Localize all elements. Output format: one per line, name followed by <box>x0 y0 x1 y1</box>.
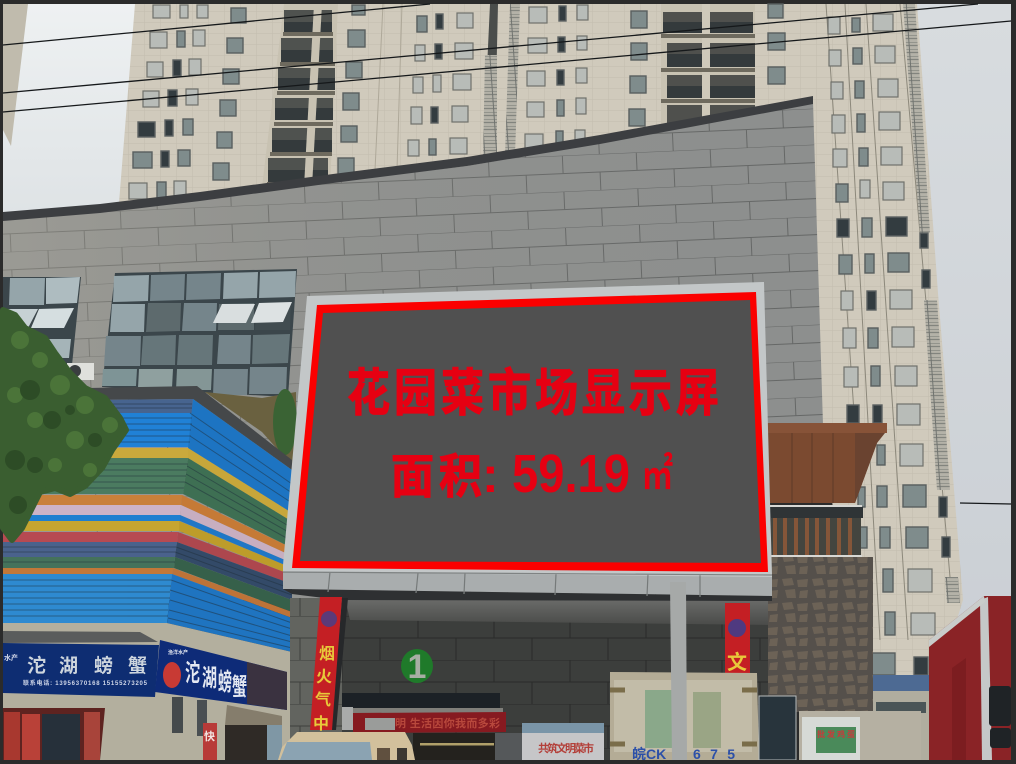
colourful slatted facade <box>3 386 292 652</box>
slat shadow lines <box>3 404 292 648</box>
small red sign: 快 <box>204 729 215 743</box>
poster <box>645 690 672 748</box>
frame lower shadow line <box>283 589 772 601</box>
poster <box>693 692 721 748</box>
wing lattice bottom <box>945 577 960 603</box>
red entrance banner: 明 生活因你我而多彩 <box>395 716 500 730</box>
bottom border <box>0 760 1016 764</box>
second truck rear <box>799 711 921 760</box>
entrance light strip <box>353 708 503 714</box>
lower cladding tint <box>283 572 772 596</box>
wing lattice lower <box>924 300 950 490</box>
wing vertical seams <box>826 4 952 640</box>
soffit <box>345 598 772 625</box>
red banner left: 气 <box>315 691 331 709</box>
right border <box>1011 0 1016 764</box>
centre window bays <box>408 13 473 156</box>
red entrance banner <box>353 712 506 733</box>
awning ledge <box>3 631 158 643</box>
green number 1 marker <box>401 648 433 686</box>
red banner left: 烟 <box>319 645 335 663</box>
wing windows <box>828 14 935 675</box>
tower base mass <box>118 4 963 700</box>
grey box <box>342 707 353 730</box>
sign: front seafood store <box>3 643 159 697</box>
screen title: 花园菜市场显示屏 <box>347 364 723 421</box>
red banner left: 中 <box>313 715 329 733</box>
entrance opening <box>413 733 495 760</box>
emblem <box>321 611 337 627</box>
slatted band under canopy <box>770 505 863 557</box>
front face slat bands <box>3 399 193 623</box>
utility box <box>495 733 522 760</box>
dark screen surface <box>300 300 761 563</box>
screen area value: ㎡ <box>642 451 673 498</box>
sign: side seafood store: 螃 <box>218 669 232 696</box>
grey clad podium wall <box>3 102 823 600</box>
truck rear with posters <box>610 672 759 762</box>
sign pole <box>670 582 687 760</box>
air conditioner unit <box>67 363 94 380</box>
red banner right <box>725 603 750 674</box>
overhead power lines <box>3 4 1011 504</box>
red banner left <box>310 597 342 733</box>
sky left <box>3 4 203 304</box>
underpass dark wall <box>340 598 772 760</box>
sign: front seafood store: 蟹 <box>128 655 147 677</box>
balcony stack left <box>262 4 338 187</box>
centre-right window bays <box>525 5 588 150</box>
shop entrance <box>225 705 282 760</box>
red banner right: 文 <box>727 650 747 674</box>
left glass curtain wall <box>3 277 81 365</box>
climbing plant <box>273 389 297 455</box>
sign: side seafood store: 沱 <box>185 659 200 687</box>
rooftop planting <box>205 392 296 470</box>
second truck rear: 批发鸡蛋 <box>817 729 855 739</box>
mascot icon <box>163 662 181 688</box>
sign: front seafood store: 湖 <box>59 655 78 677</box>
shop facade below slats <box>3 623 292 760</box>
dark post beside banner <box>331 598 348 730</box>
stone clad pier <box>768 557 873 712</box>
delivery van <box>278 718 415 760</box>
screen area value: 面积 <box>391 450 487 503</box>
building: far-left corner <box>3 4 28 146</box>
emblem <box>728 619 746 637</box>
truck rear with posters: 675 <box>693 746 735 762</box>
screen area value: : <box>482 447 499 503</box>
screen aluminium frame <box>283 282 772 596</box>
sign: side seafood store <box>155 640 287 710</box>
sign: side seafood store: 湖 <box>202 665 217 692</box>
warm wall shading <box>3 102 823 600</box>
slats roof <box>88 386 292 470</box>
green number 1 marker: 1 <box>408 648 426 686</box>
left tower barred and narrow windows <box>129 5 208 199</box>
sign: side seafood store: 蟹 <box>232 674 247 701</box>
centre glass curtain wall <box>102 269 297 397</box>
red outline <box>292 292 768 572</box>
sign: side seafood store: 渔洋水产 <box>168 649 188 656</box>
copper panel canopy <box>767 423 887 503</box>
pier windows right <box>629 4 785 126</box>
shop window <box>3 708 105 760</box>
entrance lintel <box>342 693 500 710</box>
tree <box>3 310 126 540</box>
recess left <box>172 697 183 733</box>
sign: front seafood store: 沱 <box>27 654 46 677</box>
truck open door <box>759 696 796 760</box>
wing service windows <box>920 233 950 557</box>
notice board <box>522 723 604 760</box>
balcony and lattice column centre <box>375 4 520 170</box>
LED display screen <box>283 282 772 601</box>
centre pier windows <box>338 5 365 175</box>
sign: front seafood store: 水产 <box>4 653 18 662</box>
balcony stack right <box>661 4 755 134</box>
curved roof edge <box>3 96 813 221</box>
notice board: 共筑文明菜市 <box>538 741 594 755</box>
truck rear with posters: 皖CK <box>632 746 666 762</box>
left pier windows <box>213 8 246 180</box>
screen area value <box>391 444 673 504</box>
sign: front seafood store: 联系电话: 13956370168 15155273205 <box>23 679 148 687</box>
frame lower cladding seams <box>283 572 772 597</box>
side face slat bands <box>167 399 292 652</box>
wing lattice column <box>903 4 930 233</box>
red banner left: 火 <box>316 669 332 686</box>
traffic light <box>989 686 1011 748</box>
right wing lower roof and podium <box>872 675 930 760</box>
left pier wall <box>290 598 342 760</box>
small red sign <box>203 723 217 760</box>
sky right <box>900 4 1011 760</box>
screen area value: 59.19 <box>512 444 630 504</box>
red box truck <box>929 596 1011 760</box>
recess right <box>197 700 207 736</box>
sign: front seafood store: 螃 <box>94 655 113 677</box>
